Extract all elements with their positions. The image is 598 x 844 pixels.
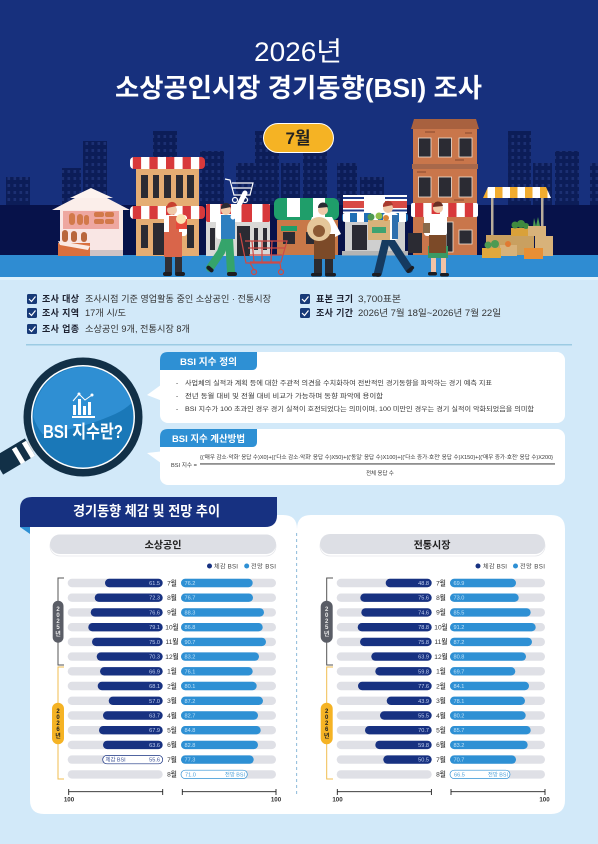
row: 2026 July: 55.6 (149, 758, 160, 764)
tab: definition (160, 352, 257, 370)
section heading (20, 497, 277, 534)
header banner (0, 0, 598, 280)
row: 2026 February: 68.1 (149, 684, 160, 690)
year bracket: 2026: 0 (56, 715, 60, 721)
row: 2025 December (97, 652, 259, 661)
row: 2026 March: 3월 (436, 696, 446, 705)
row: 2026 June: 83.2 (454, 743, 464, 749)
row: 2025 July: 69.9 (454, 581, 464, 587)
row: 2026 July: 50.5 (418, 758, 429, 764)
panel: right chart card (297, 515, 565, 814)
chart: 전통시장 (320, 534, 550, 804)
row: 2026 May: 67.9 (149, 728, 160, 734)
shop: convenience store (342, 195, 408, 256)
row: 2026 April: 4월 (436, 711, 446, 720)
shop: tall brick building (408, 119, 479, 255)
legend (476, 562, 545, 570)
row: 2026 January: 66.9 (149, 669, 160, 675)
row: 2026 January: 76.1 (184, 669, 195, 675)
chart: 소상공인 (50, 534, 282, 804)
survey item: period (300, 307, 501, 318)
person: woman with popcorn (163, 202, 187, 276)
survey item: region: 17개 시/도 (85, 308, 126, 318)
ground strip (0, 255, 598, 277)
axes (69, 789, 276, 795)
row: 2025 August: 73.0 (454, 596, 464, 602)
row: 2026 August: 전망 BSI (225, 770, 245, 778)
row: 2026 August: 8월 (167, 770, 177, 779)
row: 2026 January (375, 667, 515, 676)
panel: left chart card (30, 515, 297, 814)
row: 2025 November: 75.8 (418, 640, 429, 646)
bar tracks (337, 579, 545, 779)
year bracket: 2025: 년 (55, 630, 61, 638)
row: 2025 December: 12월 (434, 652, 448, 661)
city skyline (6, 131, 598, 208)
axis labels: 100 (271, 796, 282, 804)
row: 2025 August: 76.7 (184, 596, 195, 602)
icon: red shopping cart (240, 233, 287, 274)
year bracket: 2025: 5 (325, 625, 329, 631)
row: 2026 June: 59.8 (418, 743, 429, 749)
axis labels (332, 796, 550, 804)
survey item: region: 조사 지역 (42, 307, 79, 318)
survey item: sample: 표본 크기 (316, 293, 353, 304)
legend (207, 562, 276, 570)
row: 2026 February: 2월 (167, 681, 177, 690)
row: 2025 October (358, 622, 536, 632)
survey item: industry: 소상공인 9개, 전통시장 8개 (85, 324, 190, 334)
chart heading (50, 534, 276, 556)
icon: cart held up (225, 179, 253, 202)
row: 2026 July: 70.7 (454, 758, 464, 764)
row: 2026 July (103, 755, 254, 764)
survey item: period: 2026년 7월 18일~2026년 7월 22일 (358, 307, 501, 318)
year bracket: 2025 (321, 578, 333, 665)
row: 2026 April: 55.5 (418, 714, 429, 720)
legend: 전망 BSI (520, 562, 545, 570)
row: 2026 July (383, 755, 516, 764)
section heading: 경기동향 체감 및 전망 추이 (73, 503, 220, 519)
survey item: period: 조사 기간 (316, 307, 354, 318)
row: 2026 March: 87.2 (184, 699, 195, 705)
survey item: sample (300, 293, 401, 304)
row: 2025 September: 88.3 (184, 610, 195, 616)
year bracket: 2026: 2 (325, 721, 329, 727)
row: 2026 February (98, 681, 257, 690)
survey item: target (27, 293, 271, 304)
row: 2025 November (92, 637, 266, 646)
row: 2026 May (365, 726, 531, 734)
year bracket: 2025: 년 (324, 630, 329, 638)
row: 2026 March: 43.9 (418, 699, 429, 705)
row: 2026 March (387, 696, 525, 705)
row: 2026 August: 66.5 (454, 772, 465, 778)
definition text: - (176, 406, 178, 413)
shop: green store (274, 198, 339, 255)
row: 2025 August: 75.6 (418, 596, 429, 602)
year bracket: 2026 (52, 667, 64, 779)
month badge (264, 124, 334, 152)
year bracket: 2026: 년 (55, 732, 61, 740)
survey item: region (27, 307, 126, 318)
row: 2025 October: 10월 (434, 622, 448, 632)
definition text: 사업체의 실적과 계획 등에 대한 주관적 의견을 수치화하여 전반적인 경기동향을 파악하는 경기 예측 지표 (185, 378, 492, 387)
row: 2026 March: 78.1 (454, 699, 464, 705)
row: 2026 January (100, 667, 253, 676)
row: 2025 November: 87.2 (454, 640, 464, 646)
chart heading: 소상공인 (145, 538, 181, 552)
row: 2026 June (375, 740, 528, 749)
row: 2025 December: 80.8 (454, 655, 464, 661)
title year: 2026년 (254, 37, 342, 67)
row: 2026 June: 82.8 (184, 743, 195, 749)
shop: grey store (206, 204, 270, 256)
person: shop owner with sack (307, 202, 341, 276)
legend: 체감 BSI (214, 562, 238, 570)
row: 2025 July (386, 578, 516, 587)
row: 2025 October: 78.8 (418, 625, 429, 631)
year bracket: 2026: 0 (325, 715, 329, 721)
row: 2026 July: 77.3 (184, 758, 195, 764)
bar tracks (68, 579, 276, 779)
tab: formula (160, 429, 257, 447)
year bracket: 2025: 2 (56, 619, 60, 625)
year bracket: 2025: 0 (56, 613, 60, 619)
panel: BSI formula (147, 429, 565, 485)
row: 2026 August: 전망 BSI (488, 770, 508, 778)
row: 2025 November: 75.0 (149, 640, 160, 646)
axis labels: 100 (539, 796, 550, 804)
row: 2025 August (360, 593, 519, 602)
row: 2026 March: 3월 (167, 696, 177, 705)
axis labels (64, 796, 282, 804)
person: man carrying box (368, 201, 415, 276)
row: 2026 January: 1월 (436, 667, 446, 676)
row: 2026 March (109, 696, 263, 705)
definition text: 전년 동월 대비 및 전월 대비 비교가 가능하며 동향 파악에 용이함 (185, 391, 383, 400)
row: 2026 January: 69.7 (454, 669, 464, 675)
axis labels: 100 (332, 796, 343, 804)
year bracket: 2025: 2 (325, 619, 329, 625)
survey info list (27, 293, 501, 334)
row: 2026 July: 7월 (167, 755, 177, 764)
row: 2026 August (167, 770, 247, 779)
person: man with shopping cart (206, 179, 253, 276)
row: 2026 May: 70.7 (418, 728, 429, 734)
year bracket: 2025: 2 (325, 607, 329, 613)
row: 2026 March: 57.0 (149, 699, 160, 705)
row: 2026 May: 5월 (436, 726, 446, 734)
row: 2026 January: 59.8 (418, 669, 429, 675)
row: 2025 October: 79.1 (149, 625, 160, 631)
row: 2025 December: 83.2 (184, 655, 195, 661)
row: 2025 July: 7월 (436, 578, 446, 587)
row: 2025 October: 91.2 (454, 625, 464, 631)
legend: 체감 BSI (483, 562, 507, 570)
year bracket: 2026: 2 (56, 721, 60, 727)
row: 2025 October: 86.8 (184, 625, 195, 631)
row: 2025 July (105, 578, 253, 587)
row: 2026 June: 6월 (167, 740, 177, 749)
year bracket: 2025: 0 (325, 613, 329, 619)
row: 2025 July: 7월 (167, 578, 177, 587)
row: 2025 October (88, 622, 263, 632)
row: 2025 September (91, 608, 264, 617)
row: 2025 August (95, 593, 253, 602)
row: 2026 April (103, 711, 258, 720)
row: 2026 February (358, 681, 529, 690)
year bracket: 2026: 년 (324, 732, 329, 740)
year bracket: 2025: 5 (56, 625, 60, 631)
year bracket: 2025: 2 (56, 607, 60, 613)
row: 2026 August: 8월 (436, 770, 446, 779)
year bracket: 2026 (321, 667, 333, 779)
icon: bar chart (72, 392, 95, 418)
survey item: sample: 3,700표본 (358, 294, 401, 304)
magnifier: BSI 지수란? (0, 358, 142, 476)
legend: 전망 BSI (251, 562, 276, 570)
year bracket: 2025 (53, 578, 64, 665)
row: 2025 September (361, 608, 531, 617)
row: 2025 August: 8월 (167, 593, 177, 602)
row: 2025 November: 11월 (166, 637, 178, 646)
row: 2026 May: 5월 (167, 726, 177, 734)
survey item: industry: 조사 업종 (42, 323, 79, 334)
chart heading: 전통시장 (414, 540, 450, 552)
row: 2026 July: 체감 BSI (106, 756, 126, 764)
row: 2026 April: 82.7 (184, 714, 195, 720)
row: 2026 February: 2월 (436, 681, 446, 690)
row: 2026 July: 7월 (436, 755, 446, 764)
year bracket: 2026: 2 (56, 709, 60, 715)
panel: BSI definition (147, 352, 565, 423)
row: 2025 September: 9월 (436, 608, 446, 617)
row: 2026 August (436, 770, 510, 779)
survey item: target: 조사 대상 (42, 293, 80, 304)
row: 2026 April: 4월 (167, 711, 177, 720)
row: 2026 February: 77.6 (418, 684, 429, 690)
row: 2026 April (380, 711, 526, 720)
formula (171, 453, 555, 477)
row: 2026 January: 1월 (167, 667, 177, 676)
row: 2026 February: 80.1 (184, 684, 195, 690)
year bracket: 2026: 6 (325, 727, 329, 733)
tab: definition: BSI 지수 정의 (180, 356, 237, 368)
formula: 전체 응답 수 (366, 469, 394, 477)
person: woman with apron (423, 201, 449, 276)
row: 2025 July: 48.8 (418, 581, 429, 587)
row: 2025 August: 8월 (436, 593, 446, 602)
row: 2026 April: 80.2 (454, 714, 464, 720)
formula: {('매우 감소·악화' 응답 수)X0}+{('다소 감소·악화' 응답 수)X50}+{('동일' 응답 수)X100}+{('다소 증가·호전' 응답 수)X150}+{('매우 증가·호전' 응답 수)X200} (200, 453, 553, 461)
shop: pink stall (52, 188, 130, 256)
row: 2026 May (99, 726, 261, 734)
axes (337, 789, 545, 795)
row: 2025 August: 72.3 (149, 596, 160, 602)
axis labels: 100 (64, 796, 75, 804)
month badge: 7월 (285, 129, 311, 148)
row: 2026 May: 84.8 (184, 728, 195, 734)
definition text: - (176, 393, 178, 400)
row: 2025 December (371, 652, 526, 661)
definition text (176, 378, 534, 413)
tab: formula: BSI 지수 계산방법 (172, 433, 245, 445)
row: 2026 August: 71.0 (185, 772, 196, 778)
row: 2026 June: 6월 (436, 740, 446, 749)
year bracket: 2026: 6 (56, 727, 60, 733)
row: 2025 December: 12월 (165, 652, 179, 661)
row: 2026 May: 85.7 (454, 728, 464, 734)
row: 2026 April: 63.7 (149, 714, 160, 720)
magnifier handle (0, 440, 36, 466)
survey item: target: 조사시점 기준 영업활동 중인 소상공인 · 전통시장 (85, 293, 271, 304)
magnifier: BSI 지수란?: BSI 지수란? (43, 422, 123, 442)
row: 2025 December: 70.3 (149, 655, 160, 661)
definition text: BSI 지수가 100 초과인 경우 경기 실적이 호전되었다는 의미이며, 100 미만인 경우는 경기 실적이 악화되었음을 의미함 (185, 404, 534, 413)
row: 2026 June: 63.6 (149, 743, 160, 749)
formula: BSI 지수 = (171, 461, 197, 469)
shop: beige store (130, 157, 205, 256)
row: 2025 November: 11월 (435, 637, 447, 646)
row: 2026 February: 84.1 (454, 684, 464, 690)
chart heading (320, 534, 545, 556)
row: 2025 September: 74.6 (418, 610, 429, 616)
market stall (482, 187, 553, 259)
row: 2025 July: 61.5 (149, 581, 160, 587)
definition text: - (176, 380, 178, 387)
row: 2025 December: 63.9 (418, 655, 429, 661)
row: 2025 November: 90.7 (184, 640, 195, 646)
survey item: industry (27, 323, 190, 334)
row: 2025 September: 9월 (167, 608, 177, 617)
year bracket: 2026: 2 (325, 709, 329, 715)
row: 2025 November (360, 637, 532, 646)
main title: 소상공인시장 경기동향(BSI) 조사 (115, 73, 482, 103)
row: 2025 September: 85.5 (454, 610, 464, 616)
row: 2025 July: 76.2 (184, 581, 195, 587)
row: 2026 June (103, 740, 258, 749)
row: 2025 September: 76.6 (149, 610, 160, 616)
row: 2025 October: 10월 (165, 622, 179, 632)
